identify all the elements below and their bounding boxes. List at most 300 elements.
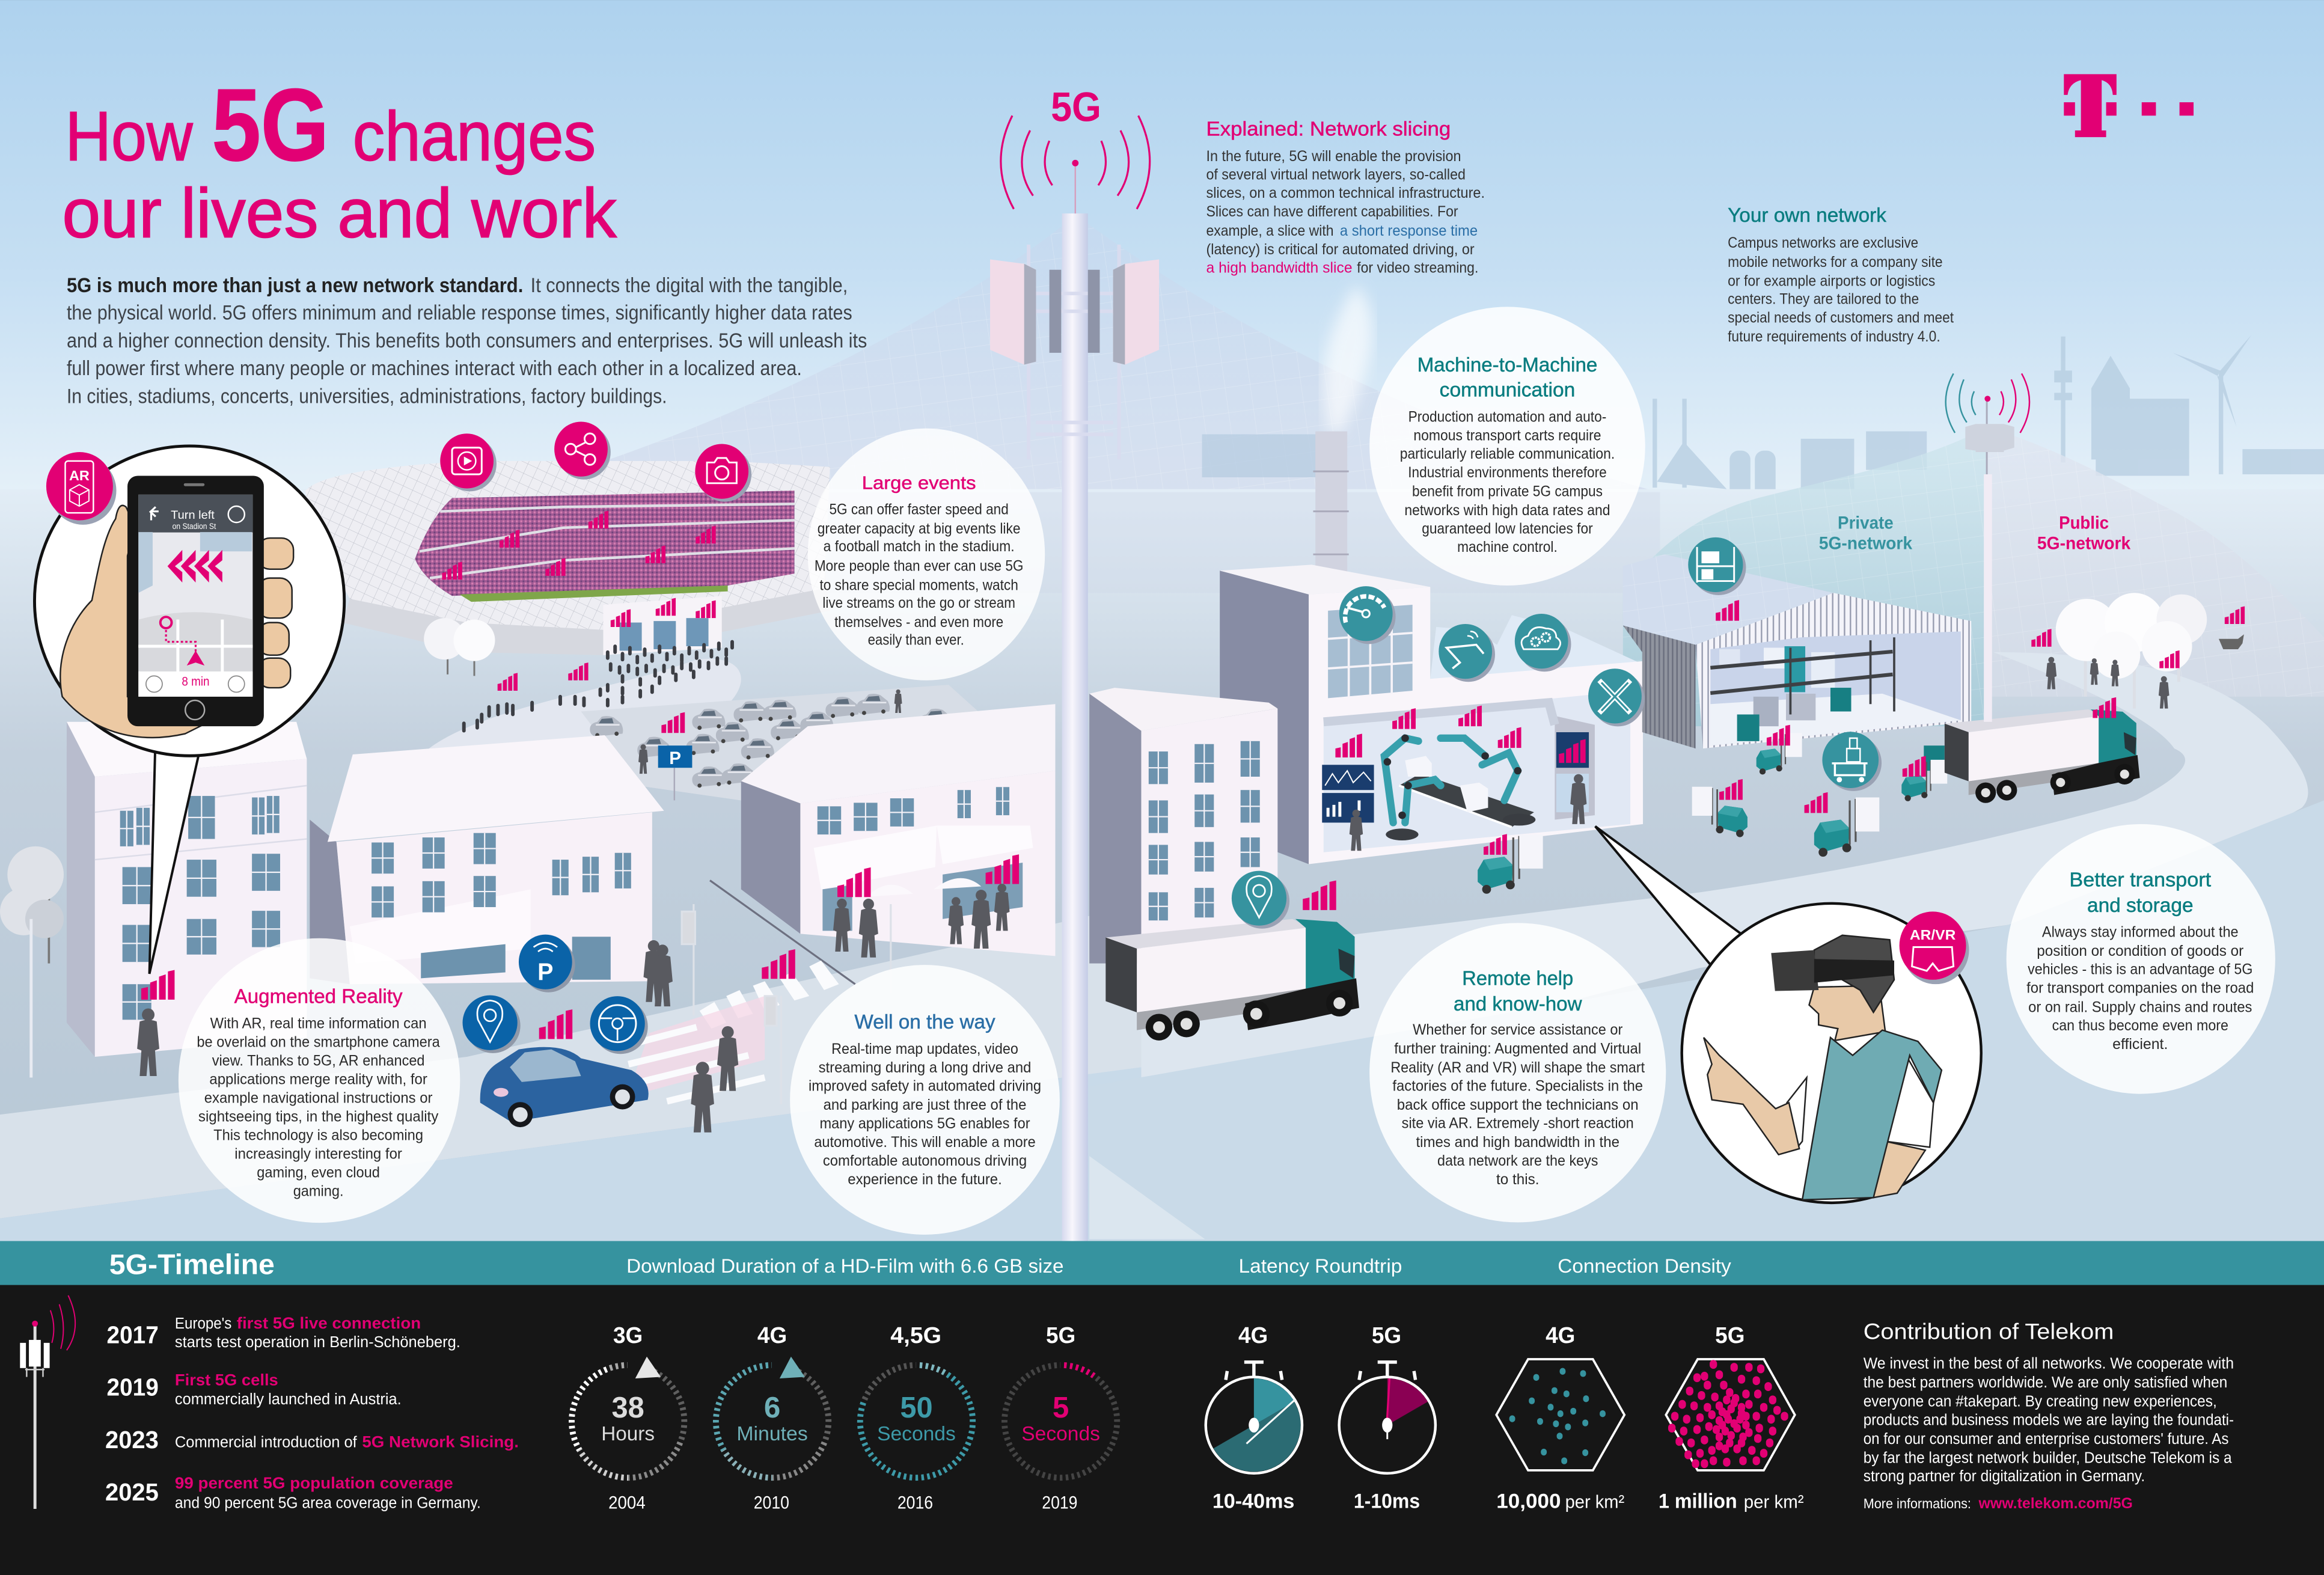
text: your own network: future requirements of industry 4.0. xyxy=(1728,328,1940,345)
map route xyxy=(166,630,195,659)
pink icon: camera xyxy=(695,444,751,502)
private network hill xyxy=(1623,427,1987,726)
dial 3G: 3G xyxy=(613,1323,643,1348)
AR badge: AR xyxy=(69,468,90,483)
intro text: the physical world. 5G offers minimum and reliable response times, significantly higher data rates xyxy=(67,301,852,324)
street lamp xyxy=(31,919,32,1078)
panel: augmented reality: Augmented Reality xyxy=(234,985,403,1008)
text: network slicing: Explained: Network slicing xyxy=(1206,118,1451,141)
intro text: In cities, stadiums, concerts, universities, administrations, factory buildings. xyxy=(67,385,667,408)
sky background xyxy=(0,0,2324,504)
antenna stem xyxy=(1075,163,1076,213)
roof xyxy=(67,722,307,777)
text: your own network: or for example airports or logistics xyxy=(1728,272,1935,289)
phone xyxy=(127,476,264,726)
panel: remote help: Whether for service assistance or xyxy=(1413,1021,1622,1038)
text: your own network: special needs of customers and meet xyxy=(1728,310,1954,326)
panel: augmented reality: With AR, real time information can xyxy=(210,1015,427,1032)
panel: augmented reality xyxy=(179,938,460,1223)
crosswalks xyxy=(627,961,839,1101)
people in park xyxy=(2046,657,2170,709)
AR badge xyxy=(46,452,117,525)
panel: augmented reality: gaming, even cloud xyxy=(257,1164,380,1181)
band: teal header xyxy=(0,1241,2324,1285)
teal icon: cloud gears xyxy=(1515,614,1571,671)
density hexagon 5G xyxy=(1659,1323,1804,1512)
building centre left xyxy=(310,735,664,984)
dial 4G xyxy=(716,1323,828,1512)
intro text: and a higher connection density. This benefits both consumers and enterprises. 5G will unleash its xyxy=(67,329,867,352)
forklifts xyxy=(1478,714,1947,894)
panel: large events: a football match in the stadium. xyxy=(824,538,1015,555)
dial 4G: 6 xyxy=(764,1391,780,1424)
stopwatch 5G: 1-10ms xyxy=(1354,1490,1420,1512)
dial 4,5G: 4,5G xyxy=(890,1323,941,1348)
panel: well on the way: experience in the future. xyxy=(848,1171,1002,1188)
panel: remote help: to this. xyxy=(1496,1171,1539,1188)
panel: augmented reality: applications merge reality with, for xyxy=(209,1071,427,1087)
panel: better transport: Always stay informed about the xyxy=(2042,923,2239,940)
building left xyxy=(67,722,307,1057)
hall interior xyxy=(1324,691,1630,852)
antenna dot xyxy=(1072,160,1078,167)
contribution of Telekom: everyone can #takepart. By creating new experiences, xyxy=(1864,1393,2217,1410)
network hill: central coverage xyxy=(489,215,1675,830)
text: network slicing: for video streaming. xyxy=(1357,260,1478,277)
dial 3G: 2004 xyxy=(608,1493,646,1512)
panel: well on the way: and parking are just three of the xyxy=(824,1096,1026,1113)
interior xyxy=(1710,631,1961,745)
panel: machine to machine: benefit from private 5G campus xyxy=(1412,483,1603,500)
teal icon: robot arm xyxy=(1439,624,1495,682)
title: our lives and work xyxy=(63,174,617,252)
phone: 8 min xyxy=(182,675,210,689)
screens xyxy=(1322,732,1589,822)
panel: augmented reality: sightseeing tips, in the highest quality xyxy=(198,1108,439,1125)
heading: download duration: Download Duration of a HD-Film with 6.6 GB size xyxy=(626,1255,1064,1277)
panel: machine to machine xyxy=(1369,307,1645,586)
vest xyxy=(1802,1030,1942,1200)
man arm and hand xyxy=(1704,1038,1799,1155)
pink arcs xyxy=(1999,373,2029,433)
panel: well on the way: comfortable autonomous driving xyxy=(823,1152,1027,1169)
dog xyxy=(2219,634,2244,649)
panel: well on the way: Well on the way xyxy=(854,1011,995,1033)
panel: well on the way: improved safety in automated driving xyxy=(809,1078,1041,1095)
dial 4G: 4G xyxy=(757,1323,787,1348)
tower dot xyxy=(1984,396,1990,402)
right sleeve xyxy=(1885,1056,1933,1147)
seated worker xyxy=(1350,810,1363,851)
dial 5G: Seconds xyxy=(1021,1423,1100,1445)
pedestrians xyxy=(137,940,738,1133)
panel: well on the way: streaming during a long drive and xyxy=(819,1059,1031,1076)
text: network slicing: Slices can have different capabilities. For xyxy=(1206,203,1458,220)
2025 xyxy=(105,1473,481,1511)
crowd xyxy=(464,642,732,731)
panel: better transport: or on rail. Supply chains and routes xyxy=(2028,999,2252,1015)
2025: 99 percent 5G population coverage xyxy=(175,1473,453,1492)
contribution of Telekom: on for our consumer and enterprise customers' future. As xyxy=(1864,1431,2228,1448)
stopwatch 4G xyxy=(1206,1323,1302,1512)
public network label: Public xyxy=(2059,513,2109,533)
centre antenna panel xyxy=(1050,270,1099,353)
tower side xyxy=(1220,570,1309,864)
dial 3G: 38 xyxy=(612,1391,644,1424)
callout circle xyxy=(34,446,344,756)
horizon ground xyxy=(0,489,2324,1245)
title: How xyxy=(65,97,193,175)
2019: First 5G cells xyxy=(175,1371,278,1389)
robot bases xyxy=(1386,814,1535,840)
dial 5G: 5 xyxy=(1053,1391,1069,1424)
front facade xyxy=(95,759,307,1057)
panel: large events xyxy=(808,429,1045,680)
building right of tower xyxy=(1089,688,1277,964)
boxes xyxy=(1405,756,1488,812)
windows xyxy=(120,796,280,1020)
2023: 5G Network Slicing. xyxy=(362,1433,519,1451)
title: changes xyxy=(353,97,596,175)
roof xyxy=(328,735,664,842)
panel: augmented reality: This technology is also becoming xyxy=(213,1127,423,1144)
tree left xyxy=(0,846,64,964)
callout tail xyxy=(1595,827,1743,967)
dial 5G: 5G xyxy=(1046,1323,1075,1348)
callout: smartphone AR xyxy=(34,446,344,974)
dial 5G xyxy=(1005,1323,1117,1512)
dial 3G xyxy=(572,1323,684,1512)
dial 4,5G: 50 xyxy=(900,1391,933,1424)
T logo xyxy=(2064,74,2194,137)
contribution of Telekom: www.telekom.com/5G xyxy=(1978,1496,2133,1512)
pink icon: share xyxy=(554,421,611,480)
parking lot xyxy=(581,685,978,800)
panel: remote help: and know-how xyxy=(1454,993,1582,1015)
chimney xyxy=(1313,432,1349,584)
building centre xyxy=(710,704,1055,984)
density hexagon 4G: 4G xyxy=(1546,1323,1575,1348)
truck lower left xyxy=(1105,919,1359,1041)
panel: machine to machine: guaranteed low latencies for xyxy=(1422,521,1593,537)
panel: machine to machine: communication xyxy=(1440,379,1575,401)
2025: 2025 xyxy=(105,1478,159,1506)
front ribs xyxy=(1696,593,1971,748)
panel: large events: themselves - and even more xyxy=(834,614,1003,631)
panel: machine to machine: particularly reliable communication. xyxy=(1400,445,1615,462)
side wall xyxy=(310,820,350,984)
heading: density: Connection Density xyxy=(1558,1255,1731,1277)
panel: large events: 5G can offer faster speed and xyxy=(829,501,1009,518)
panel: machine to machine: Machine-to-Machine xyxy=(1417,354,1597,376)
stadium roof xyxy=(305,461,830,630)
contribution of Telekom: by far the largest network builder, Deutsche Telekom is a xyxy=(1864,1449,2232,1466)
2025: and 90 percent 5G area coverage in Germany. xyxy=(175,1494,481,1511)
text: network slicing xyxy=(1206,118,1485,277)
dial 3G: Hours xyxy=(601,1423,655,1445)
technician xyxy=(1570,774,1586,824)
panel: better transport: and storage xyxy=(2087,895,2194,917)
panel: remote help: back office support the technicians on xyxy=(1397,1096,1639,1113)
ARVR badge: AR/VR xyxy=(1910,927,1956,943)
density hexagon 5G: 5G xyxy=(1715,1323,1745,1348)
dial 4,5G: Seconds xyxy=(877,1423,956,1445)
panel: well on the way xyxy=(790,965,1060,1235)
2017: 2017 xyxy=(107,1321,159,1348)
pipe xyxy=(1324,703,1555,725)
main 5G tower xyxy=(990,84,1159,1242)
public network label: 5G-network xyxy=(2037,534,2131,554)
panel: augmented reality: increasingly interesting for xyxy=(234,1145,402,1162)
pink icon: video xyxy=(440,433,497,491)
blue icon: wifi parking: P xyxy=(537,959,553,985)
2023: Commercial introduction of xyxy=(175,1434,358,1451)
panel: better transport xyxy=(2007,824,2275,1094)
panel: augmented reality: gaming. xyxy=(293,1183,344,1200)
roof xyxy=(1623,554,1833,645)
panel: augmented reality: view. Thanks to 5G, AR enhanced xyxy=(212,1053,425,1069)
cafe terrace people xyxy=(833,878,1010,958)
panel: remote help: further training: Augmented and Virtual xyxy=(1394,1040,1641,1057)
factory front xyxy=(1309,587,1643,864)
second tower xyxy=(1946,373,2029,722)
2017: first 5G live connection xyxy=(237,1314,421,1332)
left sleeve xyxy=(1787,1078,1807,1149)
contribution of Telekom xyxy=(1864,1320,2234,1512)
text: network slicing: (latency) is critical for automated driving, or xyxy=(1206,241,1475,258)
teal arcs xyxy=(1946,373,1976,433)
office side block xyxy=(1555,716,1595,820)
panel: remote help: site via AR. Extremely -short reaction xyxy=(1402,1115,1634,1131)
panel: large events: greater capacity at big events like xyxy=(818,521,1021,537)
central hill lower wash xyxy=(504,492,1660,593)
VR headset xyxy=(1771,950,1894,991)
2023 xyxy=(105,1426,519,1454)
private network label: 5G-network xyxy=(1819,534,1913,554)
band: dark footer xyxy=(0,1285,2324,1575)
trees right xyxy=(2056,593,2207,709)
shopfront xyxy=(822,863,1023,931)
text: your own network: centers. They are tailored to the xyxy=(1728,290,1919,307)
panel: remote help: data network are the keys xyxy=(1437,1152,1598,1169)
panel: large events: More people than ever can use 5G xyxy=(815,557,1023,574)
panel: better transport: for transport companies on the road xyxy=(2026,980,2254,997)
person group lot xyxy=(638,690,902,774)
sidewalk curb xyxy=(710,881,855,984)
panel: machine to machine: Production automation and auto- xyxy=(1408,409,1606,426)
ARVR badge xyxy=(1900,911,1969,984)
phone: on Stadion St xyxy=(173,522,216,531)
traffic lights xyxy=(682,904,891,1104)
left antenna panel xyxy=(990,260,1036,365)
text: network slicing: example, a slice with xyxy=(1206,222,1334,239)
signal bars xyxy=(141,511,2245,1039)
right antenna panel xyxy=(1113,260,1159,365)
hair xyxy=(1814,935,1894,1012)
fingers xyxy=(258,538,293,688)
shelves and boxes xyxy=(1710,637,1894,726)
panel: large events: easily than ever. xyxy=(868,632,964,649)
robots xyxy=(1384,738,1518,822)
text: your own network xyxy=(1728,204,1954,345)
public network label xyxy=(2037,513,2131,554)
panel: augmented reality: example navigational instructions or xyxy=(204,1089,432,1106)
panel: better transport: Better transport xyxy=(2069,869,2211,891)
icon: small tower xyxy=(20,1295,75,1509)
phone: Turn left xyxy=(171,509,215,522)
panel: large events: to share special moments, watch xyxy=(819,576,1018,593)
teal icon: cart xyxy=(1822,732,1882,791)
density hexagon 4G xyxy=(1496,1323,1624,1512)
text: network slicing: In the future, 5G will enable the provision xyxy=(1206,148,1461,165)
heading: timeline: 5G-Timeline xyxy=(109,1249,275,1280)
title xyxy=(63,68,617,252)
panel: remote help: Remote help xyxy=(1462,967,1573,989)
5G label: 5G xyxy=(1051,84,1101,130)
dark side xyxy=(67,722,95,1057)
text: your own network: Campus networks are exclusive xyxy=(1728,234,1918,251)
contribution of Telekom: We invest in the best of all networks. We cooperate with xyxy=(1864,1356,2234,1372)
heading: latency: Latency Roundtrip xyxy=(1238,1255,1402,1277)
facade xyxy=(337,812,652,984)
blue car xyxy=(480,1047,649,1127)
stopwatch 5G: 5G xyxy=(1372,1323,1401,1348)
signal arcs xyxy=(1001,115,1150,209)
callout: VR technician xyxy=(1595,827,1981,1203)
contribution of Telekom: strong partner for digitalization in Germany. xyxy=(1864,1468,2145,1485)
panel: remote help: times and high bandwidth in the xyxy=(1416,1134,1619,1151)
panel: well on the way: automotive. This will enable a more xyxy=(814,1134,1036,1151)
title: 5G xyxy=(212,68,329,182)
hall sawtooth xyxy=(1430,615,1642,697)
dial 4,5G xyxy=(860,1323,973,1512)
seats xyxy=(415,491,795,596)
panel: augmented reality: be overlaid on the smartphone camera xyxy=(197,1033,440,1050)
antenna pipes xyxy=(1029,245,1119,459)
tier lines xyxy=(420,504,795,578)
contribution of Telekom: More informations: xyxy=(1864,1496,1971,1511)
callout tail xyxy=(150,748,200,974)
density hexagon 5G: per km² xyxy=(1744,1491,1804,1512)
right forearm xyxy=(1873,1142,1925,1197)
timeline entries xyxy=(105,1314,519,1511)
trees by stadium xyxy=(424,618,495,676)
cornices xyxy=(95,786,307,860)
road right xyxy=(1089,652,2308,1086)
panel: large events: live streams on the go or stream xyxy=(822,595,1015,611)
text: network slicing: a short response time xyxy=(1340,222,1478,239)
neck and face xyxy=(1809,986,1885,1041)
city skyline xyxy=(1202,335,2324,498)
2019: 2019 xyxy=(107,1374,159,1401)
robot joints xyxy=(1387,738,1518,815)
stopwatch 4G: 4G xyxy=(1238,1323,1268,1348)
stopwatch 5G xyxy=(1339,1323,1436,1512)
windows xyxy=(818,787,1009,834)
public network hill xyxy=(1987,427,2324,697)
blue icon: steering wheel xyxy=(590,996,648,1054)
panel: remote help xyxy=(1369,923,1666,1222)
teal icon: pin xyxy=(1232,871,1289,929)
panel: remote help: factories of the future. Specialists in the xyxy=(1392,1078,1643,1095)
plaza path xyxy=(408,659,741,771)
text: your own network: Your own network xyxy=(1728,204,1886,227)
private network label: Private xyxy=(1838,513,1894,533)
contribution of Telekom: products and business models we are laying the foundati- xyxy=(1864,1412,2234,1429)
smoke xyxy=(1324,284,1372,433)
tower top xyxy=(1220,564,1430,595)
panel: better transport: vehicles - this is an advantage of 5G xyxy=(2028,961,2252,978)
intro text xyxy=(67,274,867,408)
teal icon: shelf xyxy=(1688,537,1746,595)
panel: machine to machine: machine control. xyxy=(1457,539,1558,555)
2017 xyxy=(107,1314,460,1351)
factory xyxy=(1220,284,1643,864)
panel: better transport: efficient. xyxy=(2112,1036,2168,1053)
text: network slicing: of several virtual network layers, so-called xyxy=(1206,166,1466,183)
windows xyxy=(1149,741,1260,920)
panel: remote help: Reality (AR and VR) will shape the smart xyxy=(1390,1059,1645,1076)
intro text: It connects the digital with the tangible, xyxy=(531,274,848,297)
dial 4,5G: 2016 xyxy=(897,1493,933,1512)
text: network slicing: a high bandwidth slice xyxy=(1206,260,1353,277)
conveyor xyxy=(1399,774,1534,827)
panel: large events: Large events xyxy=(862,472,976,494)
2017: starts test operation in Berlin-Schöneberg. xyxy=(175,1334,460,1351)
tower windows xyxy=(1328,605,1413,698)
panel: machine to machine: nomous transport carts require xyxy=(1413,427,1601,444)
warehouse xyxy=(1623,554,1971,748)
2019: commercially launched in Austria. xyxy=(175,1391,402,1408)
parking sign: P xyxy=(669,748,681,768)
private network label xyxy=(1819,513,1913,554)
2023: 2023 xyxy=(105,1426,159,1454)
dial 5G: 2019 xyxy=(1042,1493,1077,1512)
windows xyxy=(372,833,631,917)
entrance block xyxy=(603,596,722,655)
dial 4G: 2010 xyxy=(754,1493,789,1512)
intro text: 5G is much more than just a new network standard. xyxy=(67,274,523,297)
blue icon: wifi parking xyxy=(519,935,575,992)
text: your own network: mobile networks for a company site xyxy=(1728,254,1943,271)
parking sign xyxy=(658,745,692,800)
panel: better transport: can thus become even more xyxy=(2052,1017,2228,1034)
pitch xyxy=(459,586,728,602)
side ribs xyxy=(1623,626,1696,748)
panel: machine to machine: Industrial environments therefore xyxy=(1408,464,1607,481)
road left xyxy=(0,800,2324,1245)
shop windows xyxy=(421,937,611,980)
text: network slicing: slices, on a common technical infrastructure. xyxy=(1206,185,1485,201)
panel: well on the way: Real-time map updates, video xyxy=(831,1041,1018,1057)
parking lot cars xyxy=(590,694,952,788)
mast xyxy=(1062,213,1088,1242)
intro text: full power first where many people or machines interact with each other in a localized area. xyxy=(67,357,802,380)
panel: well on the way: many applications 5G enables for xyxy=(819,1115,1030,1132)
stopwatch 4G: 10-40ms xyxy=(1212,1490,1294,1512)
panel: machine to machine: networks with high data rates and xyxy=(1404,502,1610,519)
truck upper right xyxy=(1945,709,2140,803)
density hexagon 4G: per km² xyxy=(1565,1491,1624,1512)
awnings xyxy=(814,825,1033,889)
dial 4G: Minutes xyxy=(736,1423,808,1445)
2017: Europe's xyxy=(175,1315,231,1332)
teal icon: tools xyxy=(1588,668,1645,726)
panel: better transport: position or condition of goods or xyxy=(2037,943,2243,959)
teal icon: gauge xyxy=(1339,586,1396,644)
chevrons xyxy=(168,550,222,583)
contribution of Telekom: Contribution of Telekom xyxy=(1864,1320,2114,1344)
